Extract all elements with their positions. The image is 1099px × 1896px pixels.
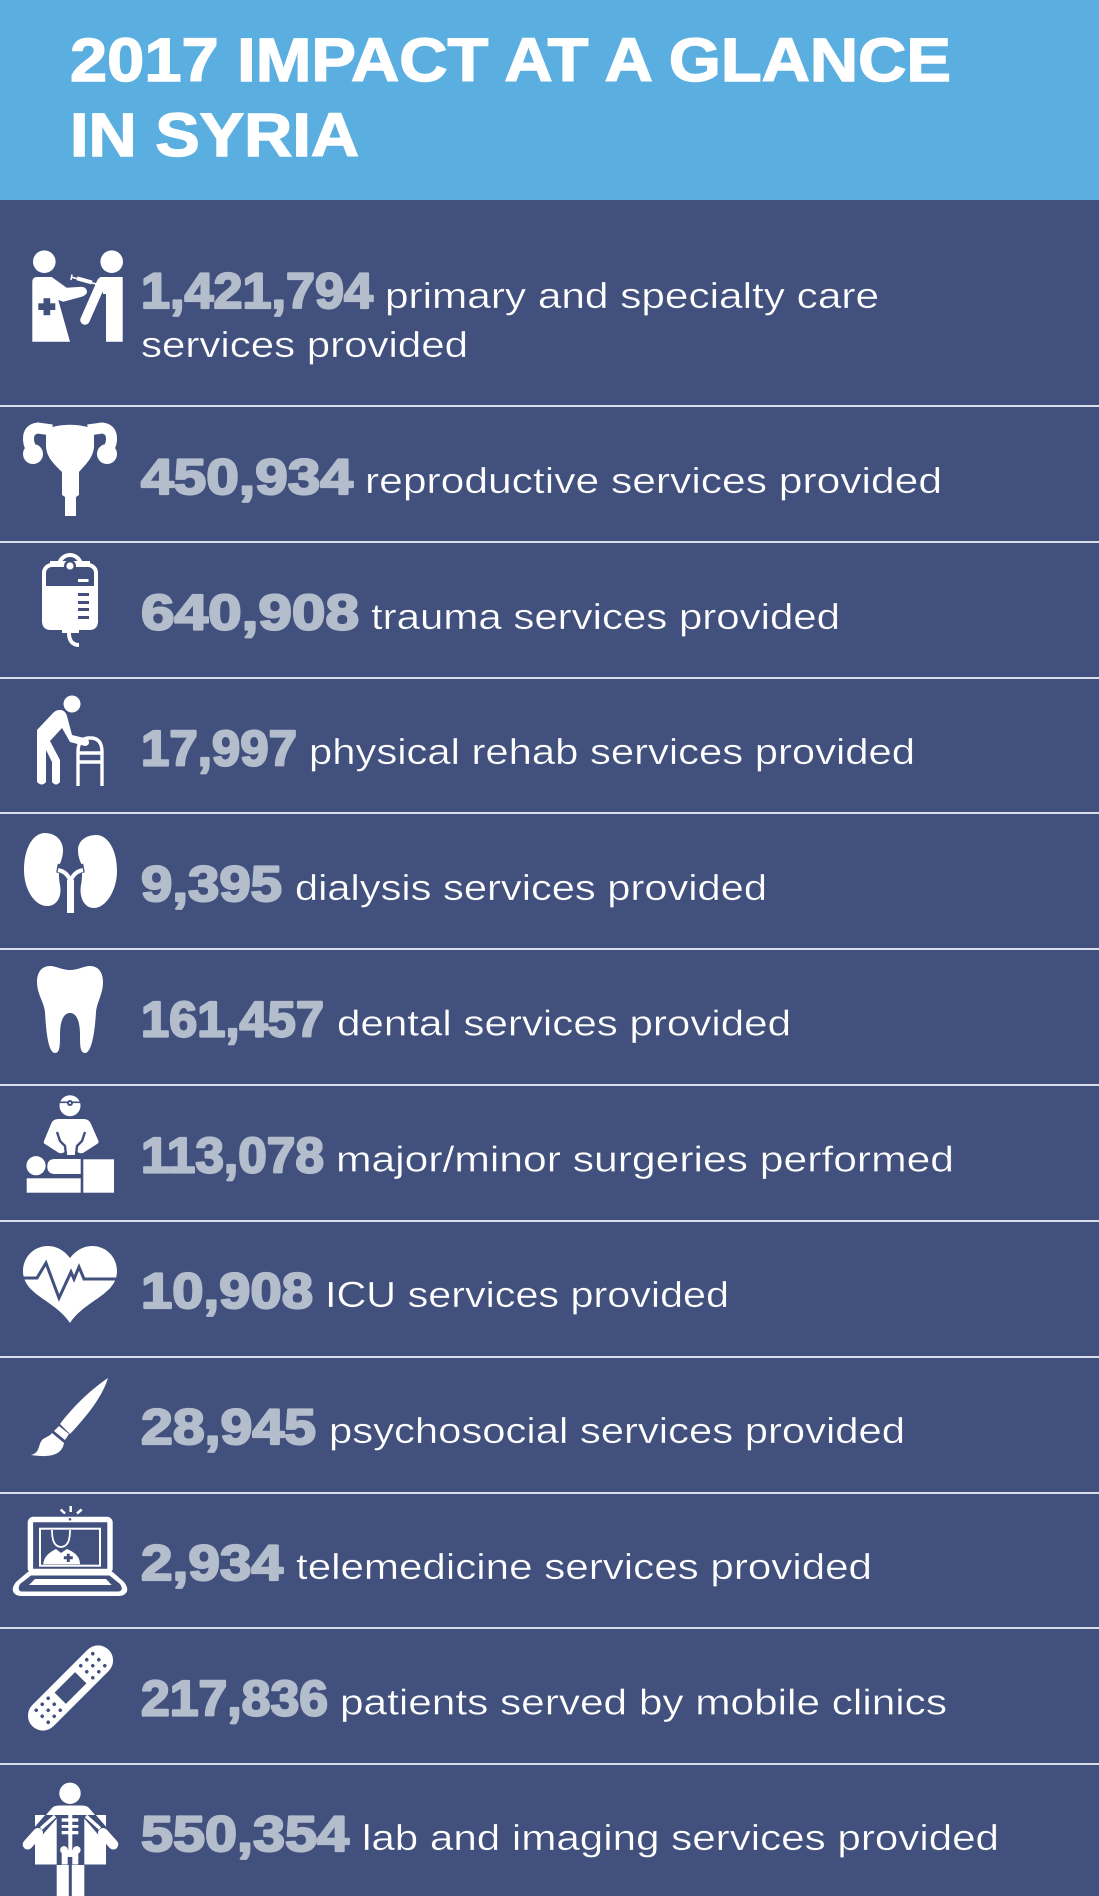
stat: lab and imaging services: 550,354 [141,1806,349,1862]
stat: mobile clinics: patients served by mobile clinics [340,1682,947,1722]
stat: reproductive services: reproductive services provided [365,460,942,501]
stat: psychosocial services [141,1399,905,1455]
title banner: IN SYRIA [70,101,359,169]
stat: reproductive services: 450,934 [141,449,353,505]
icon: tooth [37,966,103,1053]
icon: bandage [22,1639,119,1737]
title banner: 2017 IMPACT AT A GLANCE [70,26,951,94]
stat: primary and specialty care: primary and specialty care [385,275,879,316]
stat: ICU services: ICU services provided [325,1274,729,1315]
stat: trauma services [141,584,840,640]
stat: dialysis services: dialysis services provided [295,867,767,908]
stat: telemedicine services [141,1535,872,1591]
stat: primary and specialty care: 1,421,794 [141,263,373,319]
stat: physical rehab services: physical rehab services provided [309,731,915,772]
icon: doctor giving injection to patient [32,250,123,342]
stat: telemedicine services: 2,934 [141,1535,283,1591]
stat: trauma services: trauma services provided [371,596,840,637]
stat: surgeries: major/minor surgeries performed [336,1138,954,1180]
stat: lab and imaging services: lab and imaging services provided [362,1817,999,1858]
stat: physical rehab services: 17,997 [141,720,297,776]
stat: physical rehab services [141,720,915,776]
stat: psychosocial services: 28,945 [141,1399,316,1455]
stat: psychosocial services: psychosocial services provided [329,1410,905,1451]
icon: paint brush [31,1378,108,1456]
icon: uterus [23,425,117,516]
icon: kidneys [24,833,117,913]
icon: telemedicine laptop [13,1506,127,1596]
icon: surgeon operating [26,1095,114,1193]
icon: person with walker [37,696,102,786]
stat: ICU services: 10,908 [141,1263,313,1319]
stat: dialysis services: 9,395 [141,856,282,912]
stat: dental services: dental services provided [337,1002,791,1044]
stat: dialysis services [141,856,767,912]
stat: reproductive services [141,449,942,505]
stat: mobile clinics [141,1670,947,1726]
stat: surgeries [141,1128,954,1184]
stat: primary and specialty care: services provided [141,324,468,365]
stat: surgeries: 113,078 [141,1128,324,1184]
stat: primary and specialty care [141,263,879,365]
stat: mobile clinics: 217,836 [141,1670,328,1726]
stat: trauma services: 640,908 [141,584,359,640]
title banner [0,0,1099,200]
icon: heart with ECG line [23,1246,118,1323]
icon: IV drip bag [42,555,98,645]
stat: lab and imaging services [141,1806,999,1862]
icon: x-ray skeleton [28,1783,113,1896]
stat: dental services: 161,457 [141,992,324,1048]
stat: telemedicine services: telemedicine services provided [296,1546,872,1587]
stat: dental services [141,992,791,1048]
stat: ICU services [141,1263,729,1319]
